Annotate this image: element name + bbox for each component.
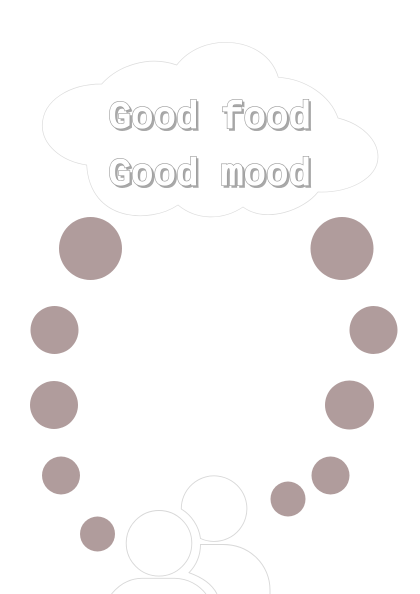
- title line 2: Good mood: [108, 154, 311, 196]
- circle: fourth left: [42, 456, 80, 494]
- icon: two people outline: [112, 476, 270, 594]
- circle: bottom right: [270, 482, 306, 516]
- circle: upper left: [59, 217, 122, 280]
- ring of circles: [30, 217, 398, 552]
- circle: upper right: [310, 217, 374, 280]
- back person: [181, 476, 270, 594]
- title: Good food Good mood: [108, 98, 313, 198]
- title line 1: Good food: [108, 98, 311, 140]
- thought cloud: [42, 42, 378, 217]
- circle: bottom left: [80, 516, 115, 552]
- circle: second left: [30, 306, 78, 354]
- front person: [112, 510, 206, 594]
- circle: third right: [325, 380, 374, 430]
- title line 1: Good food: [110, 100, 313, 142]
- title line 1: Good food: [108, 98, 311, 140]
- circle: second right: [350, 306, 398, 354]
- title line 2: Good mood: [110, 156, 313, 198]
- circle: fourth right: [312, 456, 350, 494]
- circle: third left: [30, 381, 78, 429]
- title line 2: Good mood: [108, 154, 311, 196]
